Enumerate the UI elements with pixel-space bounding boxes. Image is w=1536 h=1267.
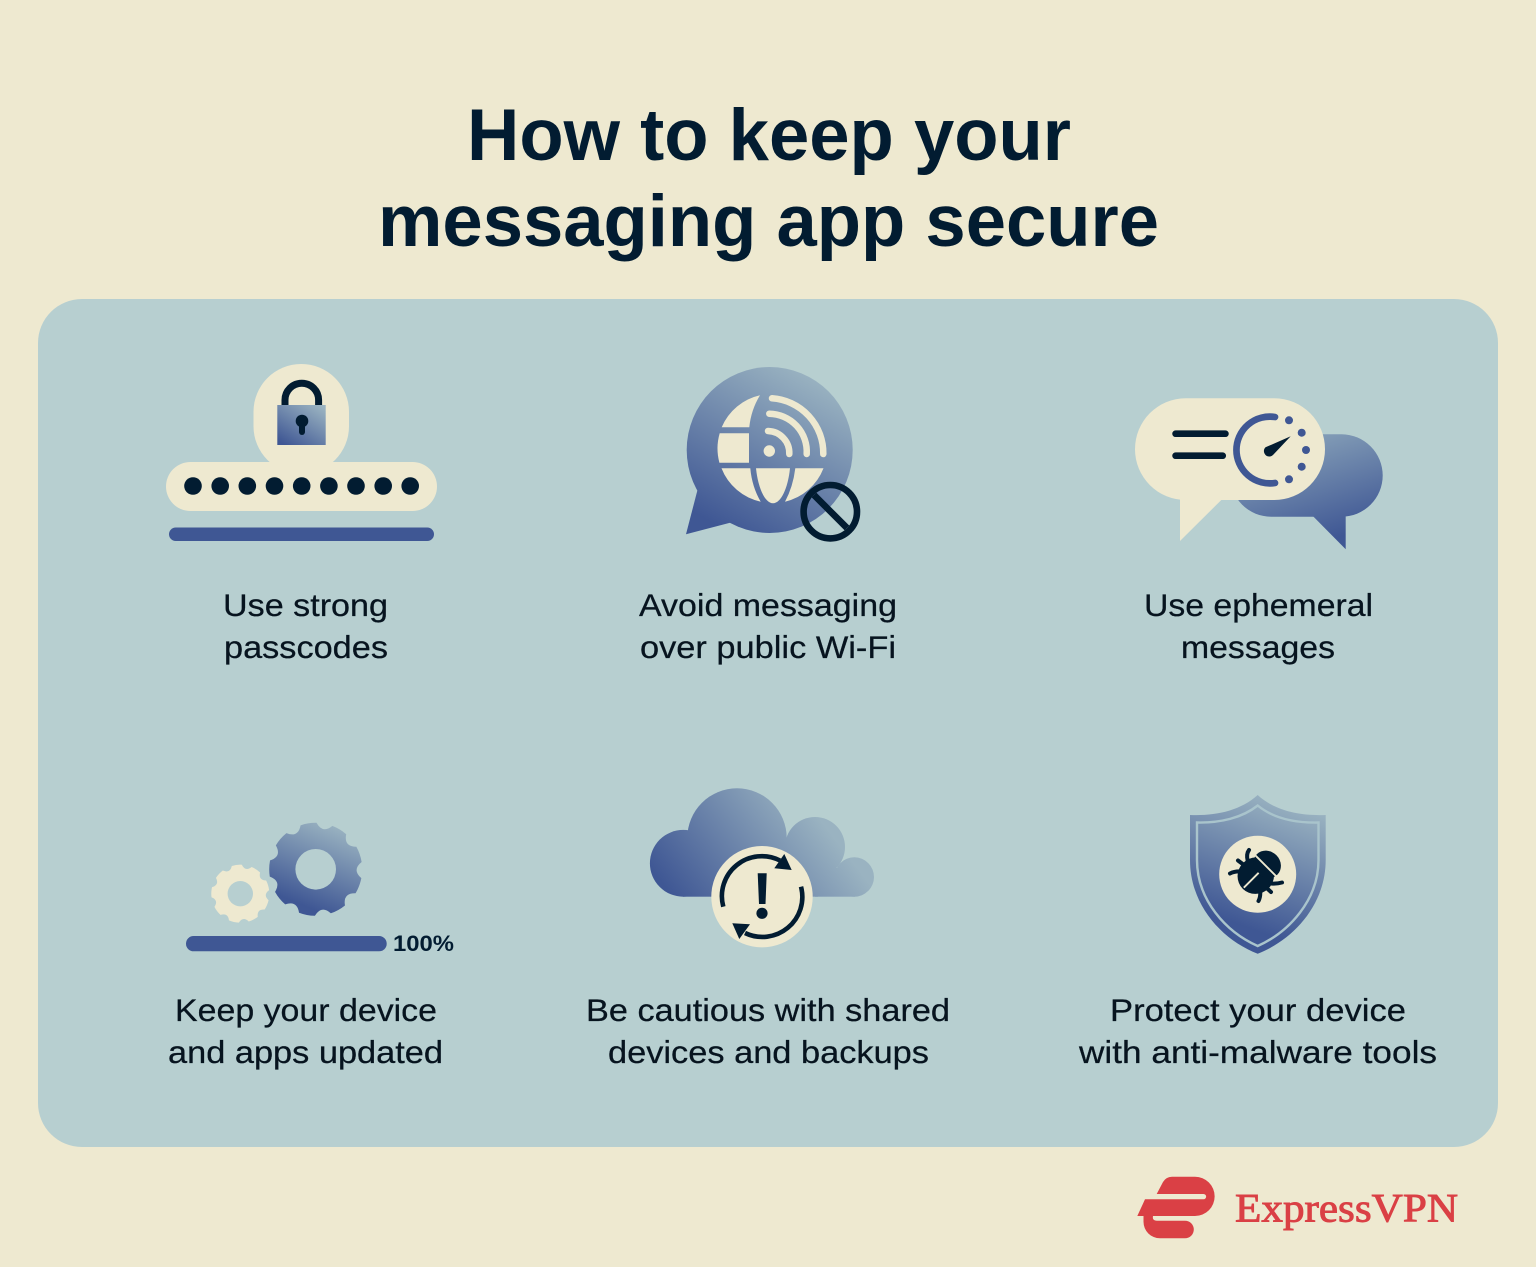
label: use ephemeral messages: Use ephemeral <box>1144 587 1373 623</box>
tip: public Wi-Fi <box>639 367 897 665</box>
title <box>378 95 1159 262</box>
icon: cloud with sync warning <box>650 788 874 947</box>
logo: ExpressVPN <box>1137 1177 1458 1238</box>
label: use strong passcodes <box>223 587 388 665</box>
tip: keep updated <box>168 810 454 1070</box>
label: be cautious with shared devices and backups <box>586 992 950 1070</box>
logo: ExpressVPN: ExpressVPN <box>1235 1186 1458 1230</box>
label: be cautious with shared devices and backups: Be cautious with shared <box>586 992 950 1028</box>
title: messaging app secure <box>378 181 1159 262</box>
panel: security tips <box>38 299 1498 1147</box>
title: How to keep your <box>467 95 1071 176</box>
label: use strong passcodes: passcodes <box>224 629 388 665</box>
tip: shared devices and backups <box>586 788 950 1070</box>
label: protect your device with anti-malware tools: with anti-malware tools <box>1078 1034 1437 1070</box>
icon: chat bubbles with timer <box>1135 398 1383 549</box>
tip: strong passcodes <box>166 364 437 665</box>
icon: password field with padlock <box>166 364 437 541</box>
label: keep your device and apps updated: Keep your device <box>175 992 437 1028</box>
tip: ephemeral messages <box>1135 398 1383 665</box>
label: use ephemeral messages <box>1144 587 1373 665</box>
label: avoid messaging over public Wi-Fi <box>639 587 897 665</box>
label: protect your device with anti-malware tools <box>1078 992 1437 1070</box>
tip: anti-malware <box>1078 795 1437 1070</box>
label: keep your device and apps updated: and apps updated <box>168 1034 443 1070</box>
label: avoid messaging over public Wi-Fi: over public Wi-Fi <box>640 629 896 665</box>
icon: gears with progress bar: 100% <box>393 931 454 956</box>
icon: chat bubble with globe, Wi-Fi and prohibition sign <box>686 367 857 538</box>
icon: gears with progress bar <box>186 822 454 952</box>
label: use strong passcodes: Use strong <box>223 587 388 623</box>
label: use ephemeral messages: messages <box>1181 629 1335 665</box>
icon: shield with bug <box>1190 795 1326 954</box>
label: be cautious with shared devices and backups: devices and backups <box>608 1034 929 1070</box>
label: protect your device with anti-malware tools: Protect your device <box>1110 992 1406 1028</box>
label: avoid messaging over public Wi-Fi: Avoid messaging <box>639 587 897 623</box>
label: keep your device and apps updated <box>168 992 443 1070</box>
